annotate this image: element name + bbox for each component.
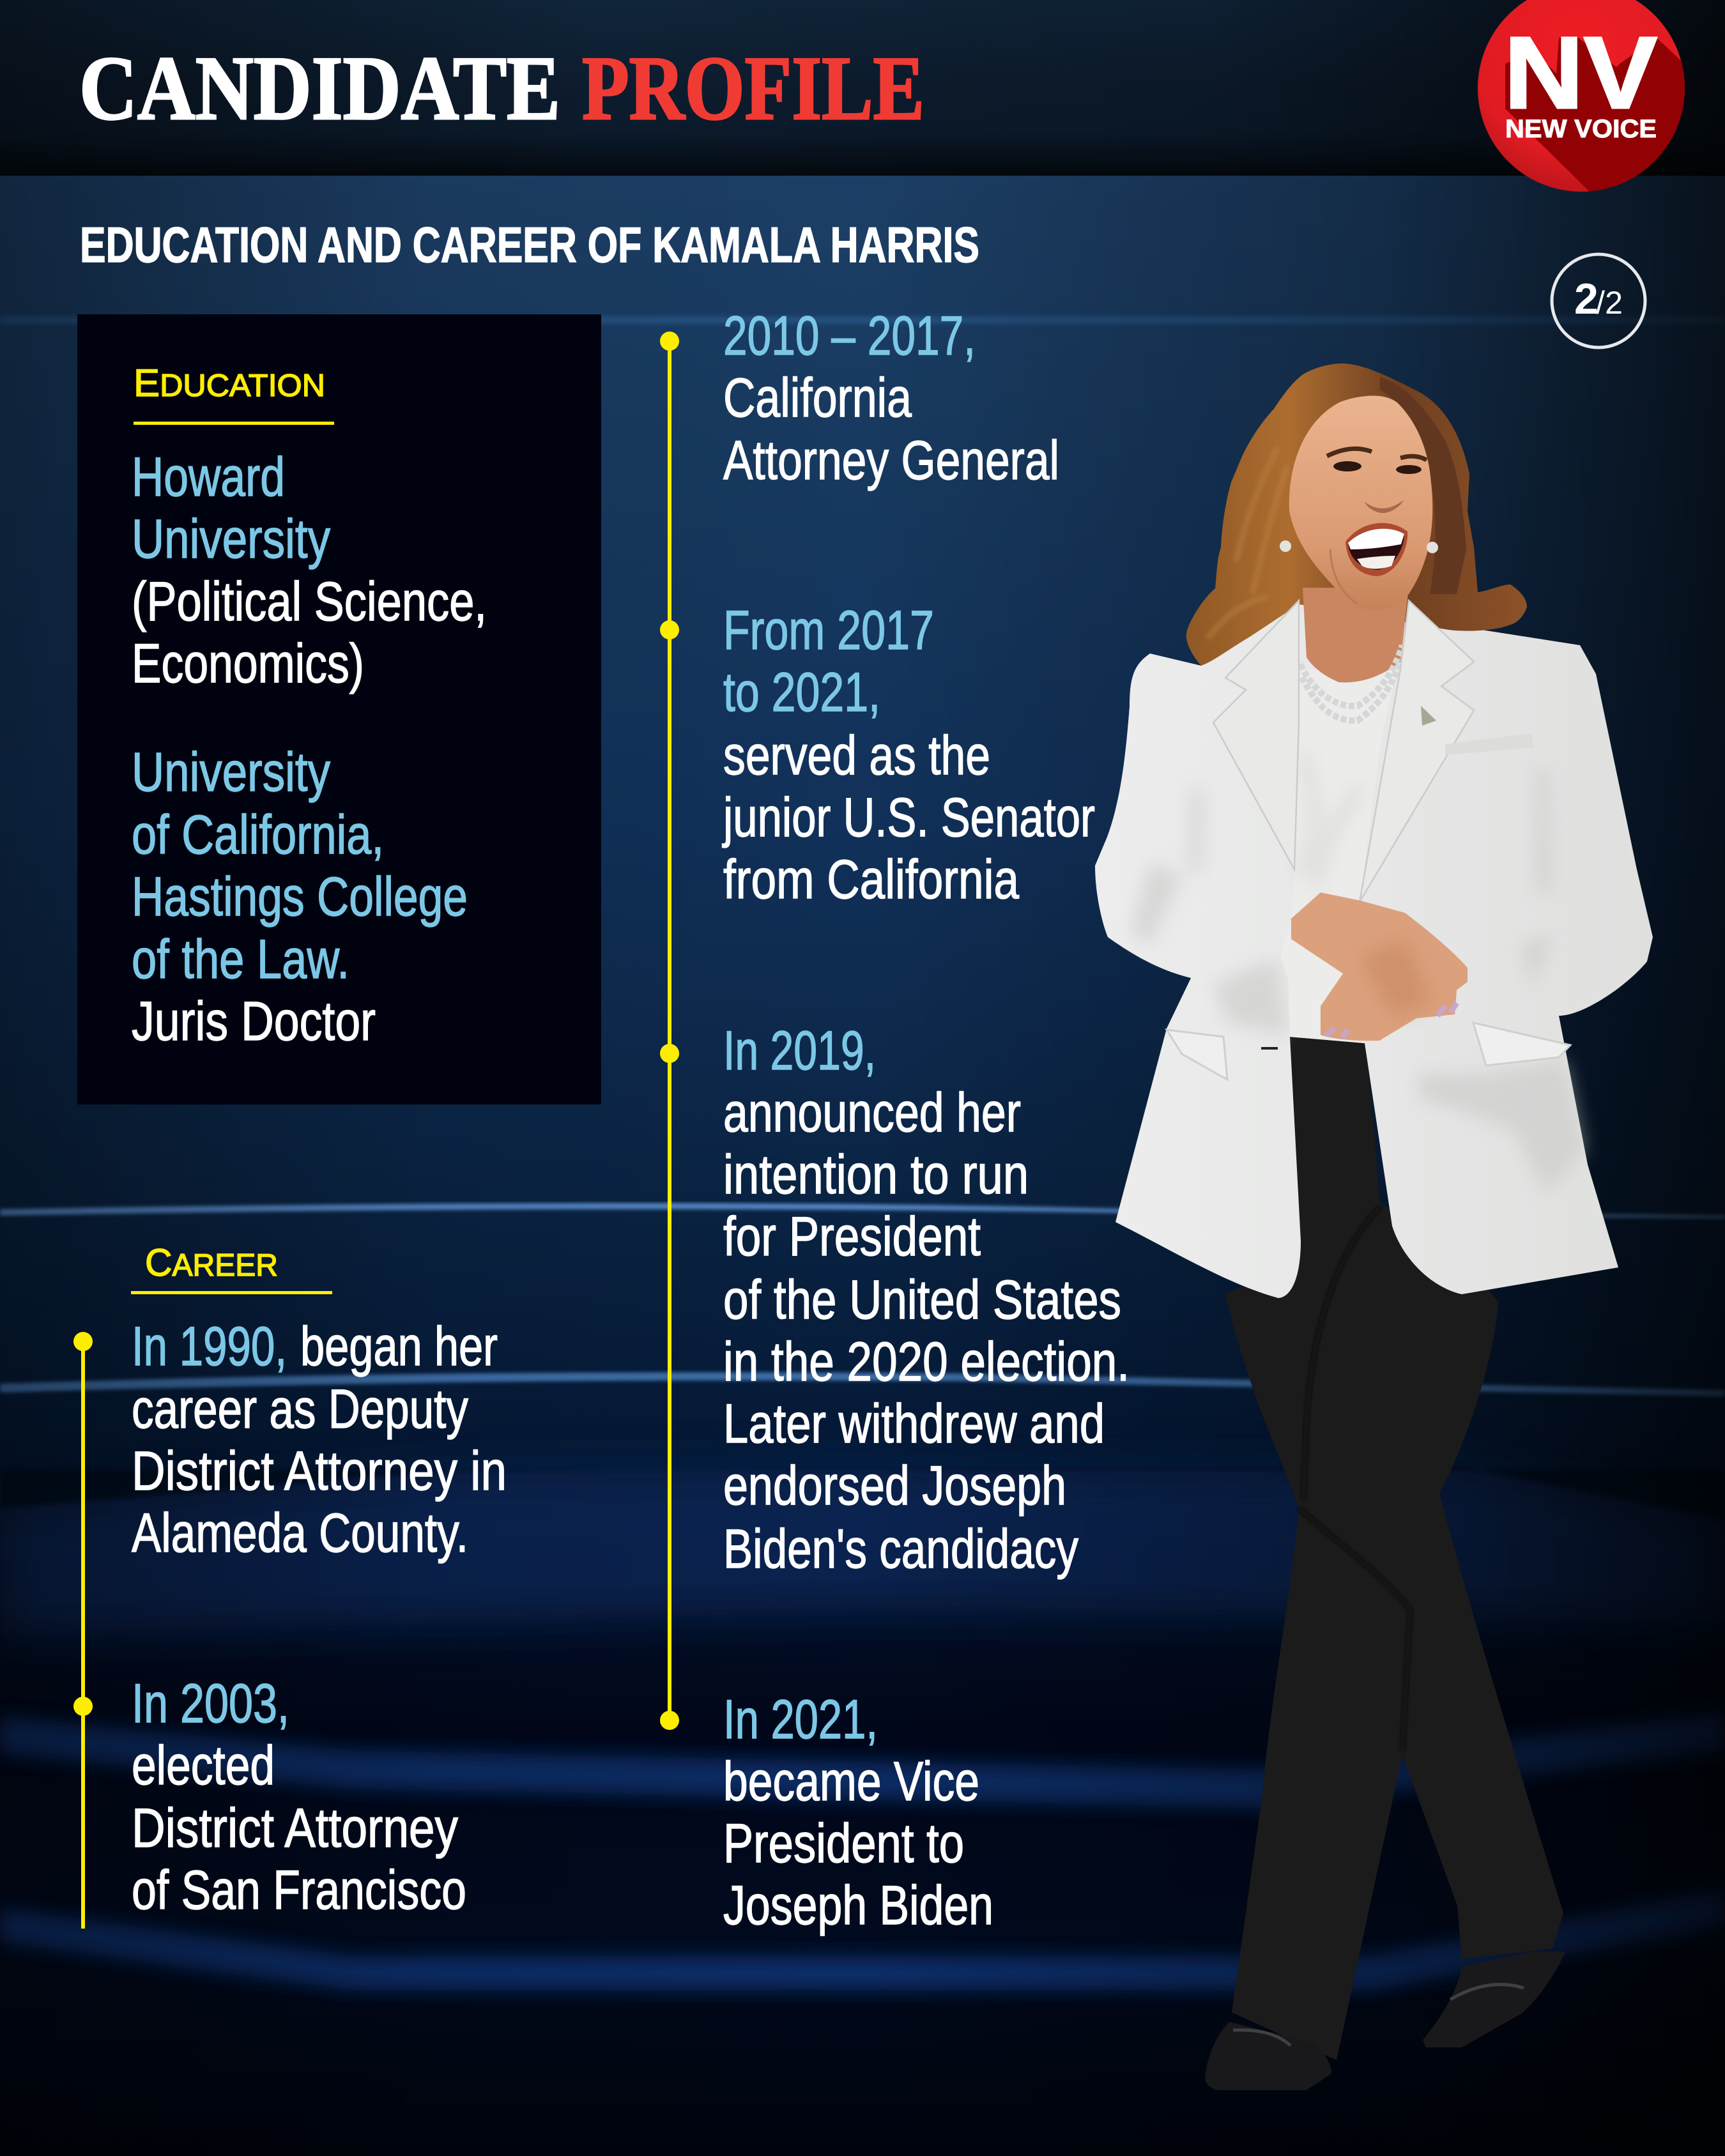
career heading: CAREER [145,1241,278,1284]
logo: NV New Voice: NEW VOICE [1505,115,1657,143]
career item 2017-2021 [722,600,1095,910]
career item 2019: Later withdrew and [723,1393,1105,1455]
eyes and eyebrows [1327,448,1427,474]
career item 2019: In 2019, [723,1020,876,1082]
career item 2010-2017 [723,305,1059,491]
career item 2003: elected [132,1735,275,1796]
hair over right temple [1380,377,1466,594]
subtitle: EDUCATION AND CAREER OF KAMALA HARRIS [80,217,979,273]
career item 2021: In 2021, [723,1689,878,1750]
logo: NV New Voice [1478,0,1685,192]
career item 1990 [132,1316,507,1564]
career item 2019: announced her [723,1082,1021,1143]
career item 2003: District Attorney [132,1798,458,1859]
lapels [1213,600,1474,902]
career item 2019: for President [723,1206,981,1267]
education: UC Hastings: Juris Doctor [132,991,376,1052]
career item 2019: of the United States [723,1269,1121,1331]
jacket shading [1131,767,1584,1195]
career item 2010-2017: California [723,367,912,429]
education: Howard University: University [132,508,330,570]
face [1289,395,1432,610]
button [1261,1047,1278,1050]
career timeline centre [660,332,679,1730]
career item 1990: District Attorney in [132,1441,507,1502]
education: UC Hastings: Hastings College [132,866,468,928]
education: Howard University: Economics) [132,633,364,694]
education: Howard University [132,447,487,694]
shirt [1280,669,1397,1043]
neck [1303,588,1409,682]
career item 2017-2021: From 2017 [723,600,934,661]
logo: NV New Voice: NV [1504,15,1657,130]
career item 1990: began her [300,1316,498,1377]
jacket [1095,600,1653,1298]
education heading [134,362,334,425]
career item 2003: of San Francisco [132,1860,466,1921]
career item 2019: endorsed Joseph [723,1455,1066,1517]
career item 2017-2021: to 2021, [723,662,880,723]
career item 2010-2017: 2010 – 2017, [723,305,976,367]
page indicator 2/2: 2 [1574,275,1598,323]
education: UC Hastings [132,742,468,1052]
page indicator 2/2: /2 [1596,285,1623,321]
career item 2010-2017: Attorney General [723,430,1059,491]
header band [0,0,1725,176]
career item 2021: President to [723,1813,964,1874]
career item 2019: intention to run [723,1144,1029,1205]
career item 1990: Alameda County. [132,1502,468,1564]
figure: candidate in white suit [1095,363,1653,2090]
necklace [1300,645,1402,721]
hands [1291,892,1468,1041]
shirt folds [1297,754,1361,888]
career item 2019 [723,1020,1130,1580]
career item 2019: in the 2020 election. [723,1331,1130,1393]
education heading: EDUCATION [134,362,325,404]
career item 2003: In 2003, [132,1673,289,1734]
career item 2003 [132,1673,466,1921]
smile lines [1330,549,1358,604]
career timeline left [73,1332,93,1929]
career item 2021: Joseph Biden [723,1875,993,1936]
education: UC Hastings: University [132,742,330,803]
education: Howard University: Howard [132,447,285,508]
career item 2019: Biden's candidacy [723,1518,1078,1580]
panel: education [77,314,601,1105]
education: UC Hastings: of the Law. [132,929,349,990]
title: PROFILE [582,38,924,139]
earrings [1280,540,1438,553]
mouth [1346,523,1407,576]
career item 2021 [723,1689,993,1936]
career item 1990: In 1990, [132,1316,287,1377]
pocket flaps [1167,1023,1570,1080]
shoes [1205,1952,1565,2090]
title [79,38,924,139]
breast pocket [1445,733,1533,755]
career item 1990: career as Deputy [132,1379,468,1440]
education: Howard University: (Political Science, [132,571,487,632]
career heading [131,1241,332,1294]
career item 2021: became Vice [723,1751,979,1812]
hair [1186,363,1527,666]
career item 2017-2021: from California [723,849,1019,910]
pants [1225,1035,1563,2060]
lapel pin [1421,706,1436,726]
title: CANDIDATE [79,38,560,139]
education: UC Hastings: of California, [132,804,384,866]
nose [1364,500,1404,513]
page indicator 2/2 [1552,254,1645,348]
career item 2017-2021: junior U.S. Senator [722,787,1095,848]
career item 2017-2021: served as the [723,725,990,786]
